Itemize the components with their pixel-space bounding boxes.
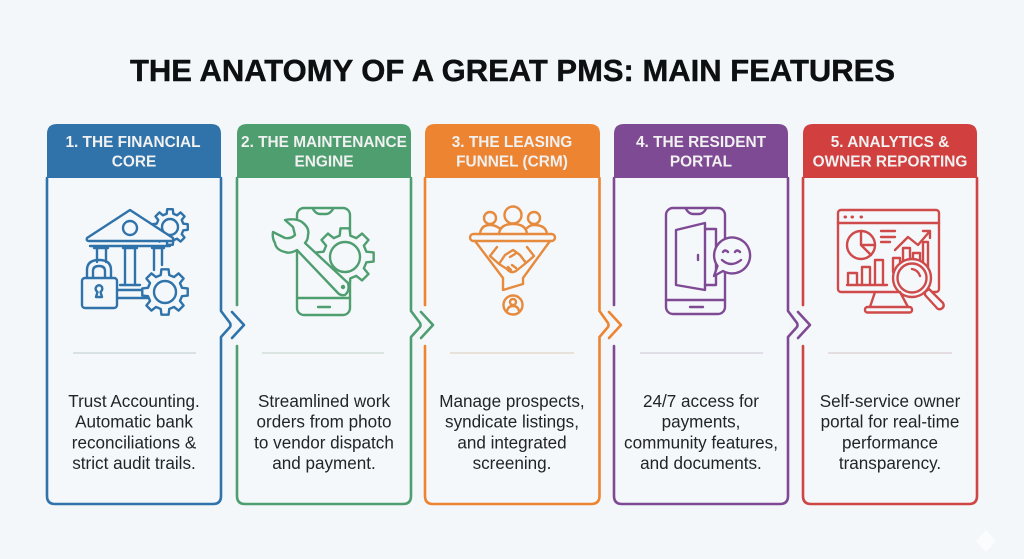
icon: monitor with charts and magnifier xyxy=(838,210,944,312)
description: Streamlined work xyxy=(258,392,390,411)
title: THE ANATOMY OF A GREAT PMS: MAIN FEATURES xyxy=(130,53,895,88)
divider xyxy=(262,352,384,354)
description: community features, xyxy=(624,433,778,452)
heading: CORE xyxy=(112,154,156,170)
divider xyxy=(828,352,952,354)
description: strict audit trails. xyxy=(72,454,196,473)
card outline xyxy=(47,178,230,504)
card outline xyxy=(425,178,608,504)
description: Automatic bank xyxy=(75,413,193,432)
card outline xyxy=(803,178,977,504)
icon: phone wrench and gear xyxy=(273,208,374,315)
panel: the resident portal xyxy=(614,124,798,504)
heading: ENGINE xyxy=(294,154,354,170)
heading: FUNNEL (CRM) xyxy=(456,154,568,170)
description: orders from photo xyxy=(257,413,391,432)
description: portal for real-time xyxy=(821,413,959,432)
icon: bank with lock and gears xyxy=(82,209,188,315)
description: transparency. xyxy=(839,454,941,473)
description: performance xyxy=(842,433,938,452)
header band xyxy=(614,124,788,178)
divider xyxy=(450,352,574,354)
icon: funnel with people and handshake xyxy=(470,206,555,314)
description: Manage prospects, xyxy=(439,392,585,411)
heading: OWNER REPORTING xyxy=(813,154,967,170)
description: and payment. xyxy=(272,454,376,473)
arrow: portal to analytics xyxy=(798,312,810,338)
icon: phone door and smiley xyxy=(666,208,750,314)
description: screening. xyxy=(473,454,551,473)
panel: the financial core xyxy=(47,124,230,504)
header band xyxy=(803,124,977,178)
description: to vendor dispatch xyxy=(254,433,394,452)
watermark sparkle xyxy=(976,530,996,552)
description: syndicate listings, xyxy=(445,413,579,432)
divider xyxy=(73,352,196,354)
description: and integrated xyxy=(457,433,567,452)
heading: 3. THE LEASING xyxy=(452,134,572,151)
header band xyxy=(47,124,221,178)
panel: analytics and owner reporting xyxy=(803,124,977,504)
panel: the maintenance engine xyxy=(237,124,420,504)
heading: PORTAL xyxy=(670,154,732,170)
description: and documents. xyxy=(640,454,762,473)
arrow: leasing to portal xyxy=(609,312,621,338)
description: Self-service owner xyxy=(820,392,961,411)
header band xyxy=(237,124,411,178)
heading: 5. ANALYTICS & xyxy=(831,134,949,151)
header band xyxy=(425,124,600,178)
card outline xyxy=(237,178,420,504)
heading: 2. THE MAINTENANCE xyxy=(241,134,407,151)
divider xyxy=(640,352,763,354)
description: Trust Accounting. xyxy=(68,392,200,411)
heading: 4. THE RESIDENT xyxy=(636,134,767,151)
description: 24/7 access for xyxy=(643,392,759,411)
description: payments, xyxy=(662,413,740,432)
arrow: financial to maintenance xyxy=(232,312,244,338)
panel: the leasing funnel xyxy=(425,124,608,504)
card outline xyxy=(614,178,798,504)
description: reconciliations & xyxy=(72,433,197,452)
arrow: maintenance to leasing xyxy=(421,312,433,338)
heading: 1. THE FINANCIAL xyxy=(65,134,201,151)
